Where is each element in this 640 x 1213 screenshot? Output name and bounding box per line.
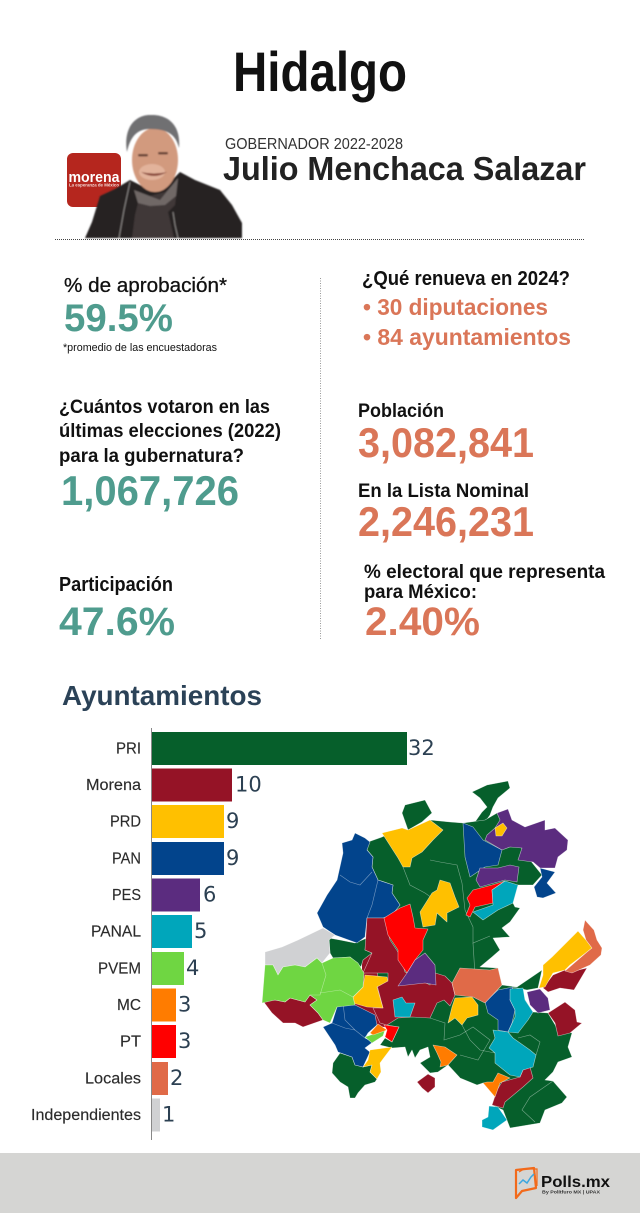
PT regions [384, 881, 505, 1042]
bar chart: ayuntamientos by party [31, 728, 435, 1140]
PVEM regions [262, 957, 385, 1043]
bar: PANAL: 5 [194, 919, 207, 943]
block: electoral share: para México: [364, 582, 477, 603]
bar: PES: PES [112, 887, 141, 904]
PAN regions [317, 823, 556, 1067]
bar: Independientes [31, 1098, 175, 1132]
bar: MC: MC [117, 997, 141, 1014]
small PRD enclave on PES [495, 823, 507, 836]
bar: PRD [110, 805, 239, 838]
municipal borders inside PRI [403, 860, 553, 1122]
block: turnout: Participación [59, 574, 173, 596]
bar: Morena [86, 768, 262, 802]
bar: PES [112, 878, 216, 912]
bar: PANAL: PANAL [91, 924, 141, 940]
bar: Morena: 10 [235, 772, 262, 796]
block: turnout [59, 574, 175, 644]
title: Hidalgo [233, 40, 407, 103]
PES regions [398, 809, 568, 1013]
bar: Locales [85, 1062, 183, 1095]
bar: PT [120, 1025, 191, 1058]
governor portrait [85, 115, 242, 238]
Polls.mx logo [516, 1168, 610, 1198]
governor role: GOBERNADOR 2022-2028 [225, 136, 403, 153]
block: approval [63, 275, 227, 354]
PVEM borders [310, 963, 353, 997]
block: votes cast: para la gubernatura? [59, 445, 244, 467]
block: nominal list [358, 480, 534, 545]
block: electoral share: 2.40% [365, 600, 480, 644]
block: population: 3,082,841 [358, 419, 534, 466]
Locales regions [452, 920, 602, 1003]
block: approval: % de aprobación* [64, 275, 227, 297]
block: approval: *promedio de las encuestadoras [63, 342, 217, 354]
Morena regions [263, 918, 587, 1108]
PAN borders [332, 872, 378, 1038]
icon: morena party logo: La esperanza de México [69, 182, 119, 188]
icon: morena party logo: morena [68, 169, 120, 186]
bar: Locales: 2 [170, 1066, 183, 1090]
block: votes cast: 1,067,726 [61, 467, 239, 514]
block: votes cast: últimas elecciones (2022) [59, 420, 281, 442]
icon: morena party logo [67, 153, 121, 207]
block: what renews in 2024: ¿Qué renueva en 2024? [362, 268, 570, 290]
independents region [265, 928, 335, 975]
block: electoral share: % electoral que representa [364, 562, 605, 583]
bar: MC [117, 988, 191, 1022]
bar: PT: 3 [178, 1029, 191, 1053]
bar: Locales: Locales [85, 1070, 141, 1088]
Polls.mx logo: By Polítfuro MX | UPAX [542, 1190, 600, 1194]
interior underlay [352, 950, 402, 1030]
bar: Independientes: Independientes [31, 1107, 141, 1124]
block: what renews in 2024 [362, 268, 571, 350]
block: what renews in 2024: • 84 ayuntamientos [363, 324, 571, 350]
MC regions [370, 1024, 510, 1097]
bar: PRD: 9 [226, 809, 239, 833]
choropleth map of Hidalgo municipalities [262, 781, 602, 1130]
block: nominal list: 2,246,231 [358, 498, 534, 545]
block: what renews in 2024: • 30 diputaciones [363, 294, 548, 320]
PANAL regions [393, 881, 536, 1130]
bar: MC: 3 [178, 992, 191, 1016]
block: population: Población [358, 400, 444, 422]
block: approval: 59.5% [64, 297, 173, 340]
PRI base regions [329, 781, 572, 1128]
block: nominal list: En la Lista Nominal [358, 480, 529, 502]
PRD regions [353, 820, 592, 1079]
block: electoral share [364, 562, 605, 644]
bar: PANAL [91, 915, 207, 948]
block: votes cast: ¿Cuántos votaron en las [59, 396, 270, 418]
heading: ayuntamientos: Ayuntamientos [62, 680, 262, 711]
bar: PVEM [98, 952, 199, 985]
Polls.mx logo: Polls.mx [541, 1174, 610, 1191]
bar: PAN: PAN [112, 850, 141, 868]
bar: Independientes: 1 [162, 1102, 175, 1126]
bar: PAN [112, 842, 239, 875]
bar: PT: PT [120, 1034, 142, 1050]
bar: Morena: Morena [86, 777, 141, 794]
bar: PRI [116, 732, 435, 765]
bar: PRI: 32 [408, 736, 435, 760]
footer band [0, 1153, 640, 1213]
bar: PRD: PRD [110, 814, 141, 830]
bar: PVEM: PVEM [98, 960, 141, 978]
bar: PES: 6 [203, 882, 216, 906]
block: turnout: 47.6% [59, 600, 175, 644]
governor name: Julio Menchaca Salazar [223, 150, 586, 187]
bar: PRI: PRI [116, 740, 141, 758]
block: population [358, 400, 534, 466]
block: votes cast [59, 396, 281, 514]
bar: PAN: 9 [226, 846, 239, 870]
bar: PVEM: 4 [186, 956, 199, 980]
